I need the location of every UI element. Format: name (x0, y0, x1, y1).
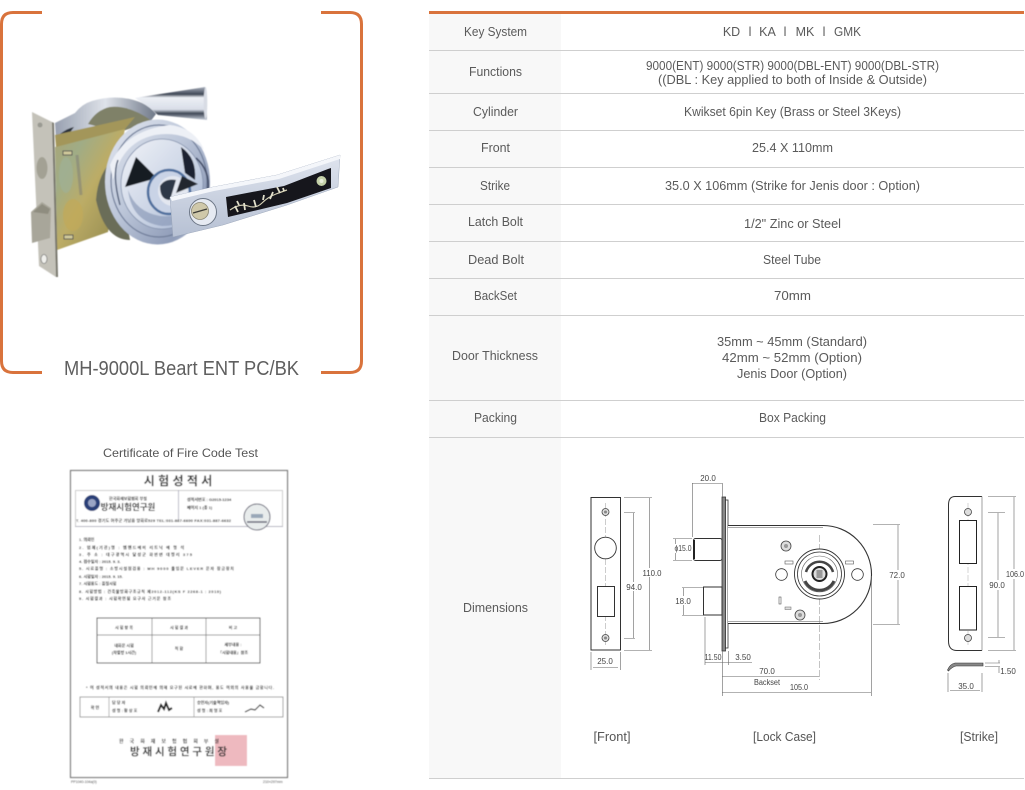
row: strike: Strike (480, 179, 510, 193)
certificate document: 확 인 (91, 704, 100, 710)
certificate document: 내화문 시험 (114, 642, 134, 648)
row: packing (474, 411, 826, 425)
certificate document: 성 명 : 황 상 호 (112, 707, 138, 713)
row: key system (464, 25, 862, 39)
row: cylinder: Cylinder (473, 105, 518, 119)
row: functions: 9000(ENT) 9000(STR) 9000(DBL-ENT) 9000(DBL-STR) (646, 59, 939, 73)
certificate document: 8. 시험방법 : 건축물방화구조규칙 제2012-112(KS F 2268-1 : 2010) (79, 588, 222, 594)
row: functions: Functions (469, 65, 522, 79)
certificate document: 5. 시료품명 : 소방시설점검용 : MH 9000 출입문 LEVER 문자 잠금장치 (79, 565, 234, 571)
certificate document: 2. 업체(기관)명 : 엠엔드에미 리트닉 에 명 석 (79, 544, 184, 550)
caption: lock case: [Lock Case] (753, 730, 816, 744)
row: door thickness: 35mm ~ 45mm (Standard) (717, 335, 867, 349)
certificate document: 1. 의뢰인 (79, 536, 95, 542)
icon: mortise lever lock (31, 87, 210, 277)
row: functions (469, 59, 939, 87)
row: door thickness: 42mm ~ 52mm (Option) (722, 351, 862, 365)
row: dimensions label: Dimensions (463, 601, 528, 615)
row: key system: KD (723, 25, 740, 39)
row: backset: BackSet (474, 289, 517, 303)
drawing: front plate: 25.0 (597, 657, 613, 666)
row: door thickness (452, 335, 867, 381)
row: strike: 35.0 X 106mm (Strike for Jenis door : Option) (665, 179, 920, 193)
drawing: strike plate: 35.0 (958, 682, 974, 691)
certificate document: 시 험 성 적 서 (144, 473, 212, 488)
certificate document: 세부내용 : (224, 641, 242, 647)
row: key system: l (784, 25, 786, 39)
certificate document: 성적서번호 : G2015-1234 (187, 496, 232, 502)
caption: front: [Front] (594, 730, 630, 744)
certificate document: 7. 시험용도 : 품질시험 (79, 580, 117, 586)
row: front (481, 141, 833, 155)
certificate document: 성 명 : 최 영 호 (197, 707, 223, 713)
drawing: lock case: 105.0 (790, 683, 808, 692)
row: packing: Packing (474, 411, 517, 425)
panel: specification table (429, 11, 1024, 779)
row: key system: l (823, 25, 825, 39)
certificate document: 9. 시험결과 : 시험확인됨 요구사 근거문 참조 (79, 595, 171, 601)
row: key system: GMK (834, 25, 862, 39)
drawing: lock case: 70.0 (759, 667, 775, 676)
certificate document: T. 400-800 경기도 여주군 가남읍 양화로529 TEL:031-887-6600 FAX:031-887-6632 (76, 517, 232, 523)
panel: product photo frame (2, 12, 362, 380)
row: door thickness: Jenis Door (Option) (737, 367, 847, 381)
row: key system: Key System (464, 25, 527, 39)
row: backset (474, 289, 811, 303)
panel: fire code certificate (70, 446, 288, 784)
certificate heading: Certificate of Fire Code Test (103, 446, 259, 460)
certificate document: (차열형 1시간) (112, 649, 137, 655)
certificate document: PP1040-104a(0) (71, 780, 97, 784)
drawing: lock case: 72.0 (889, 571, 905, 580)
row: key system: l (749, 25, 751, 39)
certificate document: 한 국 화 재 보 험 협 회 부 설 (119, 738, 219, 745)
table rule lines (429, 50, 1024, 778)
certificate document: 페이지 1 (총 1) (187, 504, 213, 510)
certificate document: 승인자(기술책임자) (197, 699, 230, 705)
label column background (429, 14, 561, 779)
certificate document: * 이 성적서의 내용은 시험 의뢰인에 의해 요구된 시료에 한하며, 용도 이외의 사용을 금합니다. (86, 684, 274, 690)
certificate document: 방 재 시 험 연 구 원 장 (130, 745, 227, 758)
row: latch bolt: 1/2" Zinc or Steel (744, 217, 841, 231)
row: key system: KA (759, 25, 776, 39)
row: front: Front (481, 141, 511, 155)
row: dead bolt (468, 253, 821, 267)
row: strike (480, 179, 920, 193)
row: key system: MK (796, 25, 815, 39)
certificate document (70, 470, 288, 784)
certificate document: 4. 접수일자 : 2015. 9. 3. (79, 558, 121, 564)
row: functions: ((DBL : Key applied to both of Inside & Outside) (658, 73, 927, 87)
drawing: strike plate: 90.0 (989, 581, 1005, 590)
drawing: front plate: 94.0 (626, 583, 642, 592)
certificate document: 비 고 (229, 624, 238, 630)
orange corner frame (2, 12, 362, 372)
certificate document: 6. 시험일자 : 2015. 9. 15. (79, 573, 123, 579)
drawing: strike plate (948, 496, 1024, 692)
certificate document: 「시험내용」참조 (218, 649, 248, 655)
row: latch bolt (468, 215, 841, 231)
row: dead bolt: Dead Bolt (468, 253, 525, 267)
certificate document: 시 험 항 목 (115, 624, 133, 630)
row: latch bolt: Latch Bolt (468, 215, 524, 229)
row: cylinder: Kwikset 6pin Key (Brass or Steel 3Keys) (684, 105, 901, 119)
icon: lever with black inlay (170, 155, 340, 237)
caption: strike: [Strike] (960, 730, 998, 744)
row: packing: Box Packing (759, 411, 826, 425)
drawing: lock case: 3.50 (735, 653, 751, 662)
certificate document: 시 험 결 과 (170, 624, 188, 630)
certificate document: 담 당 자 (112, 699, 126, 705)
certificate document: 210×297mm (263, 780, 283, 784)
drawing: lock case (673, 474, 905, 696)
certificate document: 적 합 (175, 645, 184, 651)
drawing: front plate (591, 498, 662, 670)
drawing: strike plate: 1.50 (1000, 667, 1016, 676)
certificate document: 방재시험연구원 (101, 502, 156, 512)
drawing: front plate: 110.0 (642, 569, 662, 578)
drawing: lock case: ɸ15.0 (674, 544, 692, 553)
product name: MH-9000L Beart ENT PC/BK (64, 358, 300, 380)
row: door thickness: Door Thickness (452, 349, 538, 363)
certificate document: 한국화재보험협회 부설 (109, 495, 147, 501)
row: dead bolt: Steel Tube (763, 253, 821, 267)
orange top rule (429, 11, 1024, 14)
drawing: lock case: 20.0 (700, 474, 716, 483)
drawing: lock case: 18.0 (675, 597, 691, 606)
drawing: lock case: Backset (754, 678, 781, 687)
row: front: 25.4 X 110mm (752, 141, 833, 155)
row: cylinder (473, 105, 901, 119)
row: backset: 70mm (774, 289, 811, 303)
certificate document: 3. 주 소 : 대구광역시 달성군 하빈면 대평리 375 (79, 551, 193, 557)
drawing: lock case: 11.50 (704, 653, 722, 662)
